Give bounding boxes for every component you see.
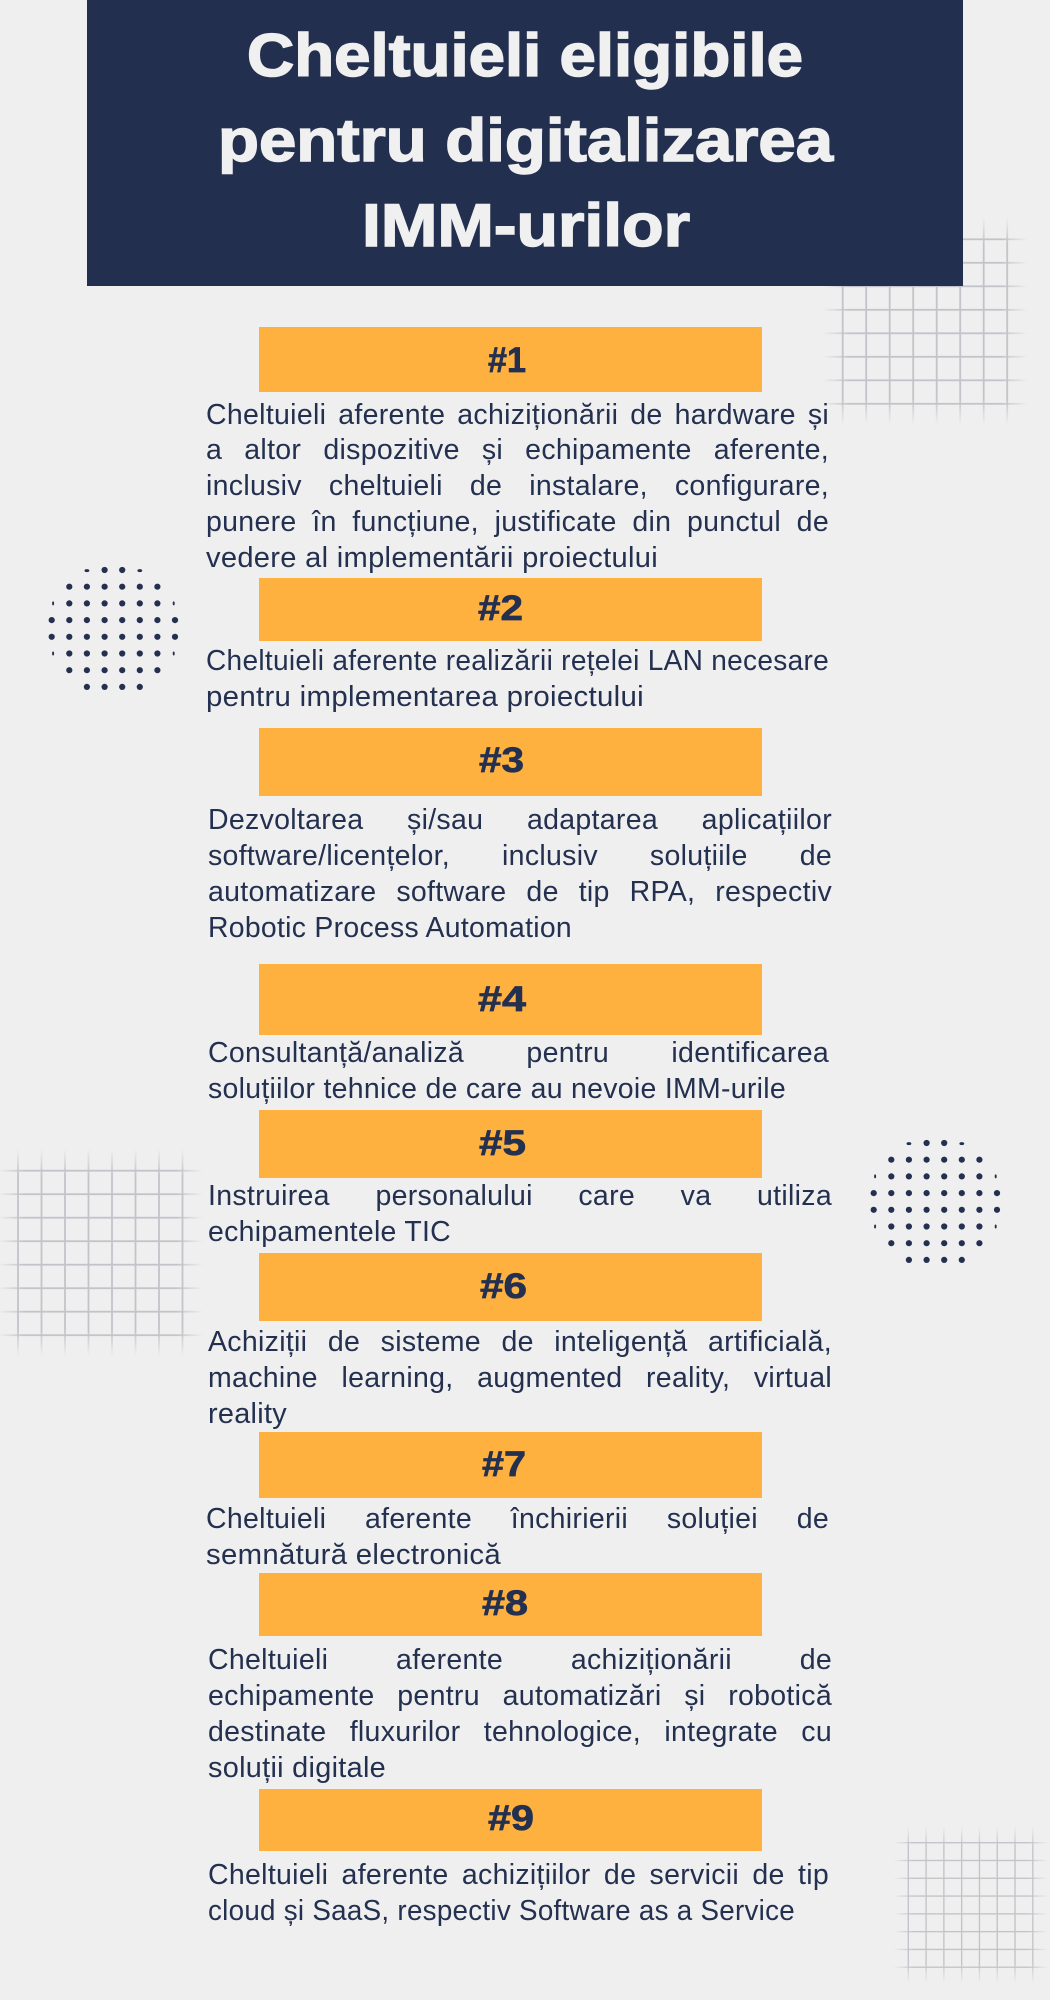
section 8 <box>208 1573 832 1784</box>
section 6: #6 <box>480 1267 527 1306</box>
section 3: Dezvoltarea și/sau adaptarea aplicațiilor <box>208 804 832 836</box>
section 8: Cheltuieli aferente achiziționării de <box>208 1644 832 1676</box>
section 6 <box>208 1253 832 1430</box>
section 8: echipamente pentru automatizări și robotică <box>208 1680 832 1712</box>
section 9 <box>208 1789 829 1927</box>
section 7: #7 <box>482 1445 526 1484</box>
section 1: a altor dispozitive și echipamente aferente, <box>206 434 829 466</box>
section 7 <box>206 1432 829 1571</box>
section 8: destinate fluxurilor tehnologice, integrate cu <box>208 1716 832 1748</box>
section 5: Instruirea personalului care va utiliza <box>208 1180 832 1212</box>
section 6: Achiziții de sisteme de inteligență artificială, <box>208 1326 832 1358</box>
section 2: Cheltuieli aferente realizării rețelei LAN necesare <box>206 645 829 677</box>
section 2: #2 <box>478 589 523 628</box>
section 5: #5 <box>479 1124 526 1163</box>
section 7: Cheltuieli aferente închirierii soluției de <box>206 1503 829 1535</box>
section 5: echipamentele TIC <box>208 1216 451 1248</box>
section 1: Cheltuieli aferente achiziționării de hardware și <box>206 399 829 431</box>
section 5 <box>208 1110 832 1248</box>
section 6: reality <box>208 1398 287 1430</box>
section 9: #9 <box>488 1799 534 1838</box>
section 8: soluții digitale <box>208 1752 386 1784</box>
title banner: IMM-urilor <box>362 192 690 259</box>
section 3: automatizare software de tip RPA, respectiv <box>208 876 832 908</box>
section 7: semnătură electronică <box>206 1539 502 1571</box>
section 3: Robotic Process Automation <box>208 912 572 944</box>
section 3: software/licențelor, inclusiv soluțiile de <box>208 840 832 872</box>
title banner: Cheltuieli eligibile <box>247 22 803 89</box>
section 4: soluțiilor tehnice de care au nevoie IMM-urile <box>208 1073 786 1105</box>
title banner <box>87 0 963 286</box>
section 4: #4 <box>478 980 527 1019</box>
section 1: vedere al implementării proiectului <box>206 542 658 574</box>
section 4 <box>208 964 829 1105</box>
section 2 <box>206 578 829 713</box>
section 9: Cheltuieli aferente achizițiilor de servicii de tip <box>208 1859 829 1891</box>
section 1: inclusiv cheltuieli de instalare, configurare, <box>206 470 829 502</box>
section 9: cloud și SaaS, respectiv Software as a Service <box>208 1895 795 1927</box>
section 8: #8 <box>482 1584 528 1623</box>
title banner: pentru digitalizarea <box>218 107 834 174</box>
section 1: #1 <box>488 341 526 380</box>
section 4: Consultanță/analiză pentru identificarea <box>208 1037 829 1069</box>
section 3: #3 <box>479 741 524 780</box>
section 1: punere în funcțiune, justificate din punctul de <box>206 506 829 538</box>
section 1 <box>206 327 829 574</box>
section 6: machine learning, augmented reality, virtual <box>208 1362 832 1394</box>
section 3 <box>208 728 832 944</box>
section 2: pentru implementarea proiectului <box>206 681 644 713</box>
